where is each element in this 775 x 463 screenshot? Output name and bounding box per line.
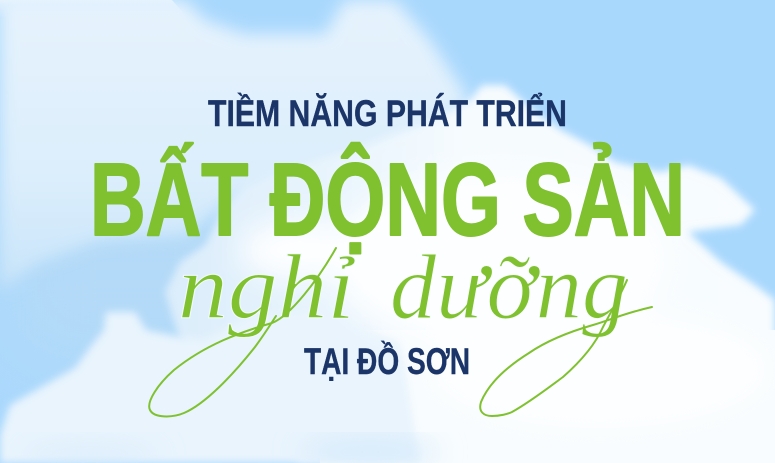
soft highlights inside the clouds [240, 170, 770, 430]
left flourish loop [149, 248, 336, 416]
heading: tại đồ sơn: TẠI ĐỒ SƠN [304, 340, 470, 382]
heading: tiềm năng phát triển: TIỀM NĂNG PHÁT TRIỂN [208, 92, 567, 134]
lower-left white cloud [0, 310, 420, 463]
right flourish loop [480, 280, 652, 416]
script heading: nghỉ dưỡng [149, 236, 652, 416]
script word: nghỉ: nghỉ [178, 236, 355, 338]
main white cloud [165, 85, 775, 463]
script word: dưỡng: dưỡng [390, 236, 628, 338]
pale patches on the lower edge [20, 442, 440, 462]
hazy upper-left cloud [0, 0, 470, 290]
